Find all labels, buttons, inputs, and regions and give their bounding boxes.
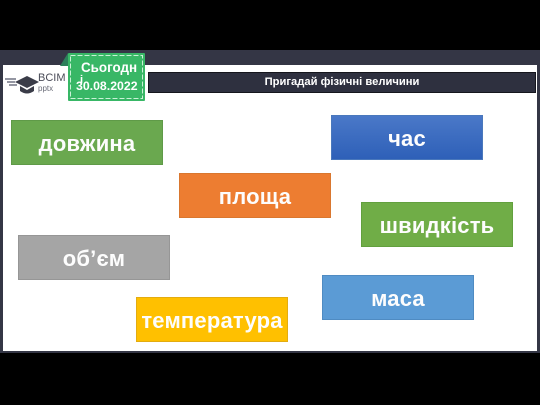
logo: BCIM pptx: BCIM	[38, 72, 66, 84]
card: температура: температура	[141, 308, 283, 333]
badge label: Сьогодн	[81, 60, 137, 75]
card: час	[331, 115, 483, 160]
title bar	[148, 72, 536, 93]
badge wrapped letter: і	[80, 74, 83, 86]
title bar: Пригадай фізичні величини	[265, 76, 419, 88]
card: маса: маса	[371, 286, 425, 311]
card: час: час	[388, 126, 426, 151]
card: площа	[179, 173, 331, 218]
card: об'єм: об’єм	[63, 246, 125, 271]
badge date: 30.08.2022	[76, 79, 138, 93]
dashed badge border	[70, 55, 143, 99]
card: довжина: довжина	[39, 131, 135, 156]
card: маса	[322, 275, 474, 320]
card: об'єм	[18, 235, 170, 280]
logo: BCIM pptx	[5, 72, 66, 94]
card: площа: площа	[219, 184, 291, 209]
card: температура	[136, 297, 288, 342]
logo: BCIM pptx: pptx	[38, 84, 53, 93]
card: швидкість	[361, 202, 513, 247]
date badge	[68, 53, 145, 101]
card: довжина	[11, 120, 163, 165]
card: швидкість: швидкість	[380, 213, 494, 238]
white content area	[3, 65, 537, 351]
badge fold	[60, 53, 68, 66]
slide panel	[0, 50, 540, 353]
